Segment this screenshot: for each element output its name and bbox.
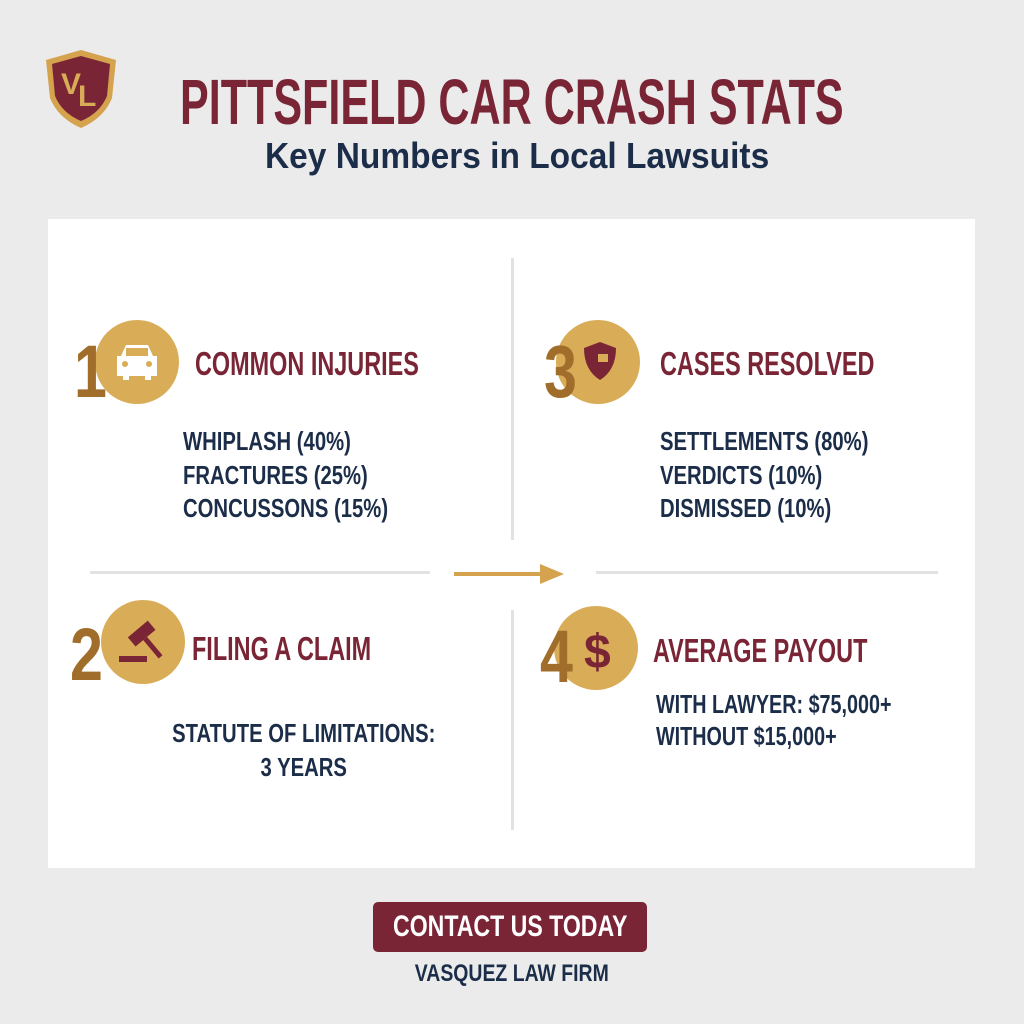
heading: AVERAGE PAYOUT: [653, 632, 867, 669]
list: WITHOUT $15,000+: [656, 721, 837, 751]
subtitle: Key Numbers in Local Lawsuits: [265, 135, 769, 176]
heading: COMMON INJURIES: [195, 345, 419, 382]
section 1: common injuries: [74, 320, 419, 523]
heading: CASES RESOLVED: [660, 345, 874, 382]
list: DISMISSED (10%): [660, 493, 831, 523]
number 1: 1: [74, 330, 107, 413]
logo shield: [46, 50, 116, 128]
logo shield: V: [61, 68, 81, 101]
icon: dollar: $: [584, 626, 611, 679]
list: [656, 689, 892, 751]
list: VERDICTS (10%): [660, 460, 822, 490]
text: 3 YEARS: [261, 752, 347, 782]
title: PITTSFIELD CAR CRASH STATS: [180, 66, 844, 138]
heading: FILING A CLAIM: [192, 630, 371, 667]
section 3: cases resolved: [544, 320, 874, 523]
text: [172, 718, 436, 782]
list: [660, 426, 868, 523]
list: SETTLEMENTS (80%): [660, 426, 868, 456]
button: contact us today: CONTACT US TODAY: [393, 910, 627, 943]
section 2: filing a claim: [70, 600, 436, 782]
icon: shield: [556, 320, 640, 404]
list: FRACTURES (25%): [183, 460, 368, 490]
button: contact us today: [373, 902, 647, 952]
footer: firm name: VASQUEZ LAW FIRM: [415, 960, 609, 987]
icon: dollar: [554, 606, 638, 690]
list: WITH LAWYER: $75,000+: [656, 689, 892, 719]
arrow: [454, 564, 564, 584]
number 2: 2: [70, 613, 103, 696]
number 3: 3: [544, 330, 577, 413]
section 4: average payout: [540, 606, 892, 751]
icon: gavel: [101, 600, 185, 684]
text: STATUTE OF LIMITATIONS:: [172, 718, 436, 748]
number 4: 4: [540, 615, 573, 698]
list: WHIPLASH (40%): [183, 426, 351, 456]
list: [183, 426, 388, 523]
icon: car: [95, 320, 179, 404]
main panel: [48, 219, 975, 868]
logo shield: L: [78, 80, 96, 113]
list: CONCUSSONS (15%): [183, 493, 388, 523]
